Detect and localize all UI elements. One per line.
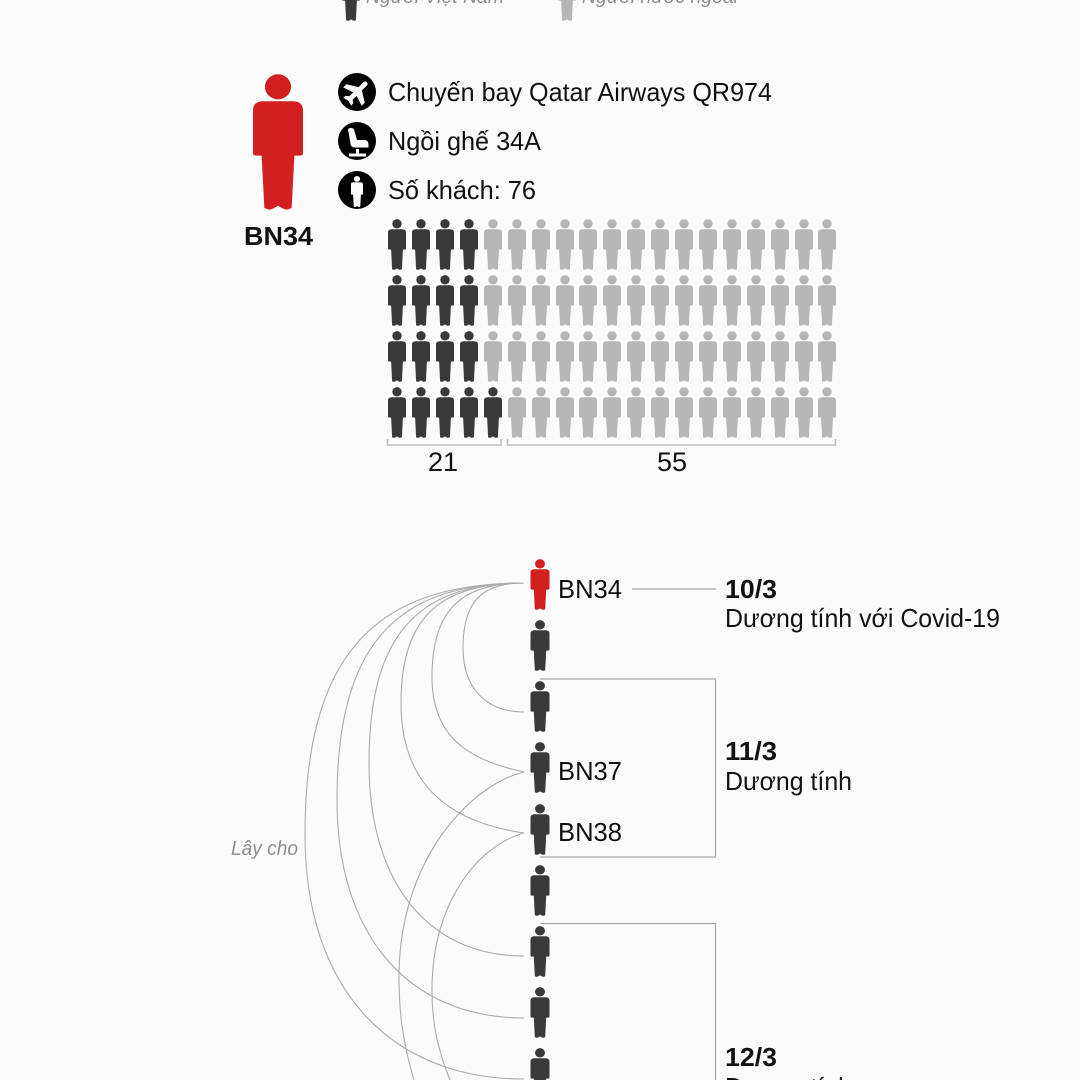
- figure: BN38: [530, 804, 550, 855]
- label: BN38: BN38: [558, 817, 622, 847]
- bracket: 11/3 group: [540, 679, 716, 857]
- figure: BN34 red: [530, 559, 550, 610]
- date block: 10/3: [725, 574, 1000, 633]
- patient BN34 figure: [244, 74, 314, 251]
- figure: patient 8: [530, 987, 550, 1038]
- text: flight number: Chuyến bay Qatar Airways QR974: [388, 77, 772, 107]
- icon: Vietnamese person: [342, 0, 360, 21]
- number: 55: 55: [657, 447, 687, 477]
- label: BN37: BN37: [558, 756, 622, 786]
- flight details: [338, 73, 772, 209]
- icon: passenger: [338, 171, 376, 209]
- date block: 10/3: Dương tính với Covid-19: [725, 603, 1000, 633]
- row 2 of passengers: [388, 275, 836, 326]
- label: BN34 in timeline: BN34: [558, 574, 622, 604]
- date block: 12/3: 12/3: [725, 1042, 777, 1072]
- row 4 of passengers: [388, 387, 836, 438]
- connector: BN34 to 10/3: [632, 588, 716, 590]
- legend: Vietnamese and foreign passengers: [342, 0, 739, 21]
- patient column: [530, 559, 550, 1080]
- icon: foreign person: [558, 0, 576, 21]
- figure: patient 3: [530, 681, 550, 732]
- infection curves from BN34: [305, 583, 524, 1079]
- date block: 10/3: 10/3: [725, 574, 777, 604]
- date block: 11/3: [725, 736, 852, 796]
- row 3 of passengers: [388, 331, 836, 382]
- figure: patient 9: [530, 1048, 550, 1080]
- row 1 of passengers: [388, 219, 836, 270]
- figure: patient 7: [530, 926, 550, 977]
- label: Lây cho: Lây cho: [231, 838, 298, 860]
- date block: 12/3: [725, 1042, 852, 1080]
- infection curves from BN37 and BN38: [399, 772, 524, 1080]
- date block: 11/3: Dương tính: [725, 766, 852, 796]
- icon: plane: [338, 73, 376, 111]
- bracket: 12/3 group: [540, 924, 716, 1080]
- figure: BN37: [530, 742, 550, 793]
- text: passenger count: Số khách: 76: [388, 175, 536, 205]
- figure: patient 2: [530, 620, 550, 671]
- bracket: foreign passenger count: [508, 439, 836, 477]
- date block: 11/3: 11/3: [725, 736, 777, 766]
- number: 21: 21: [428, 447, 458, 477]
- icon: seat: [338, 122, 376, 160]
- label: BN34: BN34: [244, 221, 314, 251]
- bracket: Vietnamese passenger count: [388, 439, 501, 477]
- passenger pictogram grid: [388, 219, 836, 438]
- figure: patient 6: [530, 865, 550, 916]
- icon: large red person: [253, 74, 303, 210]
- text: seat number: Ngồi ghế 34A: [388, 126, 542, 156]
